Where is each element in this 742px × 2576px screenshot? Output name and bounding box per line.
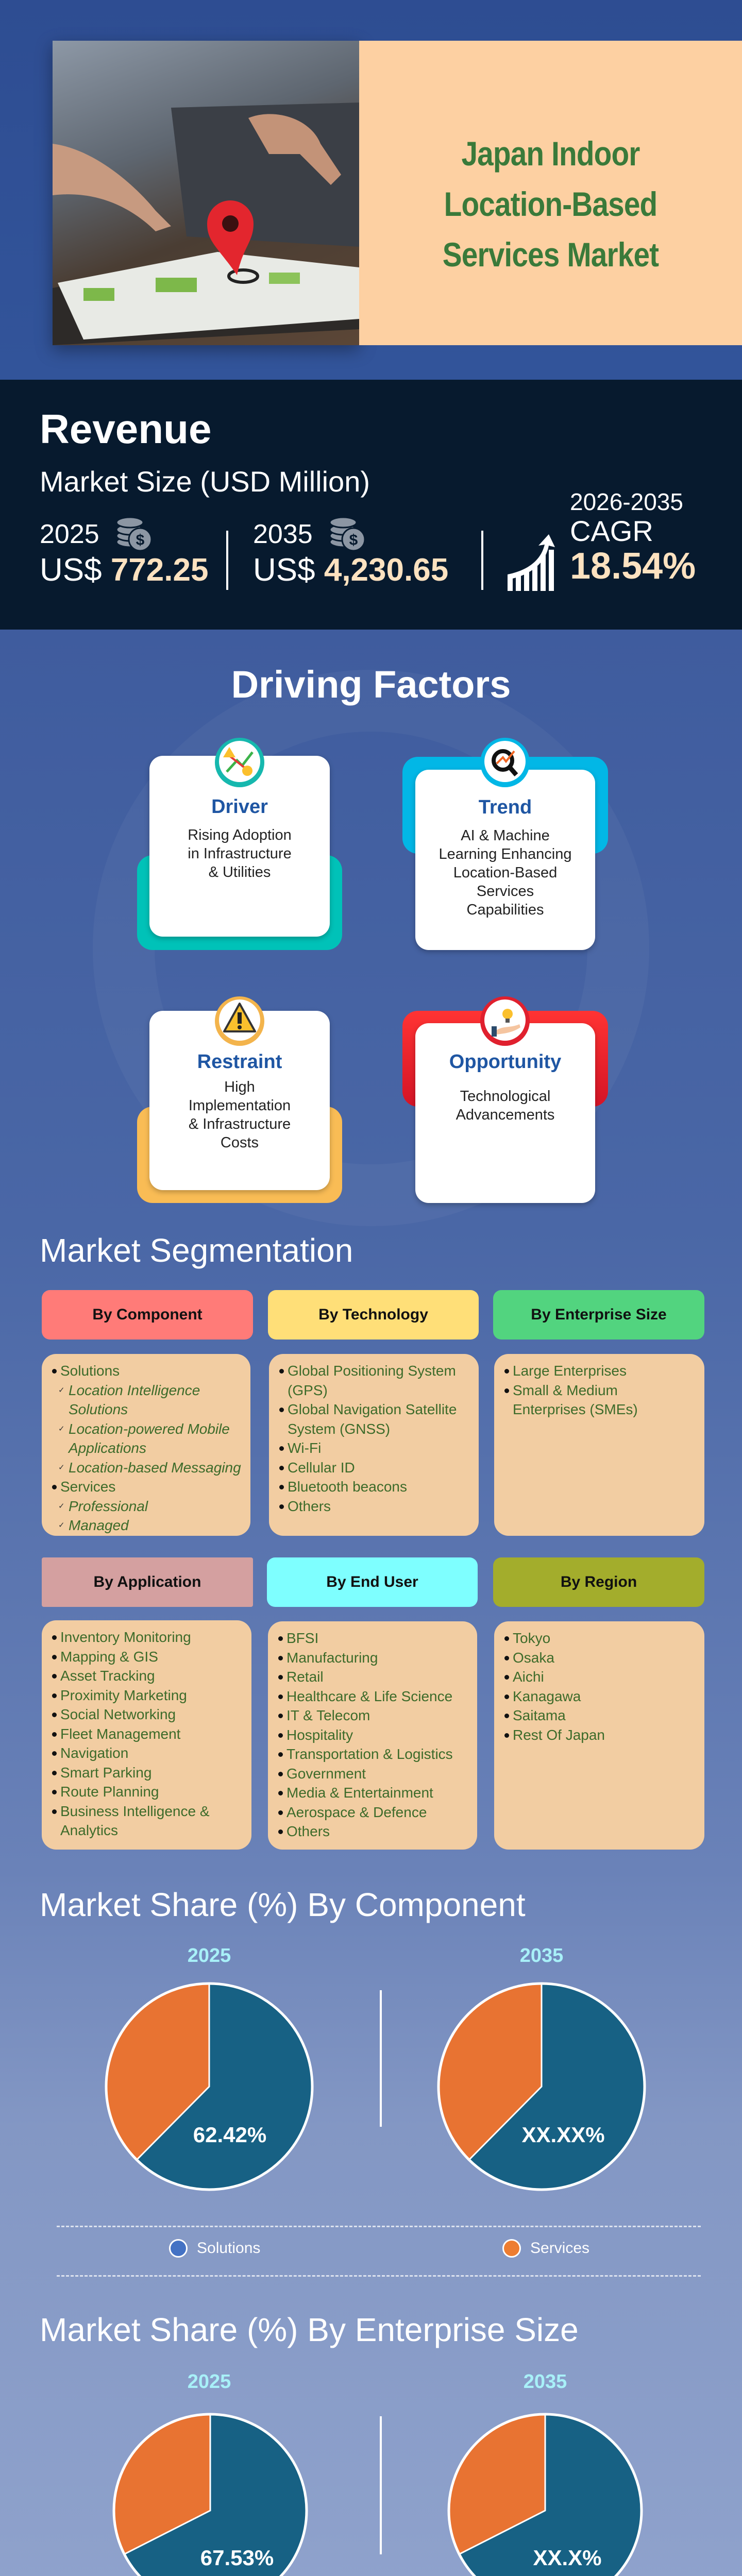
- panel: driver: Driver: [211, 796, 268, 818]
- title: Location-Based: [444, 185, 657, 223]
- CAGR: 2026-2035: [570, 488, 683, 515]
- panel: trend: Trend: [479, 796, 532, 818]
- icon: growth chart: [508, 534, 555, 591]
- pie chart: component 2035: [437, 1982, 646, 2191]
- pie chart: component 2035: XX.XX%: [521, 2123, 605, 2147]
- panel: restraint: Costs: [221, 1134, 259, 1151]
- legend: component: Solutions: [197, 2240, 260, 2257]
- icon: warning: [215, 996, 264, 1046]
- icon: coins: [331, 518, 364, 550]
- segment: by application: Fleet Management: [60, 1726, 180, 1741]
- 2035 value: 2035: [253, 519, 313, 549]
- segment: by application: Mapping & GIS: [60, 1649, 158, 1664]
- segment: by component: [42, 1290, 253, 1536]
- heading: market segmentation: Market Segmentation: [40, 1232, 353, 1269]
- segment: by application: Social Networking: [60, 1706, 176, 1722]
- 2025 value: [40, 518, 208, 588]
- pie chart: enterprise 2035: XX.X%: [533, 2546, 602, 2570]
- icon: coins: $: [349, 532, 358, 549]
- 2035 value: US$ 4,230.65: [253, 552, 448, 588]
- 2025 value: US$ 772.25: [40, 552, 208, 588]
- 2025 value: 2025: [40, 519, 99, 549]
- segment: by technology: Others: [288, 1498, 331, 1514]
- segment: by component: By Component: [92, 1306, 203, 1323]
- label 2035: 2035: [524, 2371, 567, 2393]
- segment: by end user: By End User: [326, 1573, 418, 1590]
- segment: by component: Applications: [69, 1440, 146, 1456]
- panel: driver: [137, 738, 342, 950]
- segment: by component: Services: [60, 1479, 115, 1495]
- segment: by region: Rest Of Japan: [513, 1727, 605, 1742]
- pie chart: enterprise 2035: [447, 2413, 643, 2576]
- segment: by application: Business Intelligence &: [60, 1803, 210, 1819]
- segment: by end user: Media & Entertainment: [286, 1785, 433, 1801]
- segment: by application: Analytics: [60, 1822, 118, 1838]
- panel: driver: in Infrastructure: [188, 845, 292, 862]
- segment: by region: Tokyo: [513, 1630, 550, 1646]
- panel: restraint: [137, 996, 342, 1203]
- CAGR: CAGR: [570, 515, 653, 547]
- market size label: Market Size (USD Million): [40, 465, 370, 498]
- segment: by enterprise size: [493, 1290, 704, 1536]
- panel: trend: [402, 738, 608, 954]
- panel: restraint: High: [224, 1079, 255, 1095]
- label 2035: 2035: [520, 1945, 563, 1967]
- panel: trend: Capabilities: [467, 902, 544, 918]
- segment: by component: Location-based Messaging: [69, 1459, 241, 1476]
- segment: by end user: Hospitality: [286, 1727, 353, 1742]
- segment: by component: Solutions: [60, 1363, 120, 1379]
- segment: by end user: IT & Telecom: [286, 1707, 370, 1723]
- title: Japan Indoor: [461, 134, 640, 173]
- segment: by end user: BFSI: [286, 1630, 318, 1646]
- segment: by enterprise size: Large Enterprises: [513, 1363, 627, 1379]
- segment: by application: Proximity Marketing: [60, 1687, 187, 1703]
- icon: opportunity: [480, 996, 530, 1046]
- segment: by technology: Bluetooth beacons: [288, 1479, 407, 1495]
- panel: opportunity: Opportunity: [449, 1051, 561, 1073]
- panel: restraint: & Infrastructure: [189, 1116, 291, 1132]
- segment: by technology: System (GNSS): [288, 1421, 390, 1436]
- panel: driver: & Utilities: [209, 864, 271, 880]
- icon: coins: $: [136, 532, 145, 549]
- segment: by application: Inventory Monitoring: [60, 1629, 191, 1645]
- divider: [226, 531, 228, 590]
- segment: by technology: Cellular ID: [288, 1459, 355, 1476]
- segment: by component: Professional: [69, 1498, 148, 1514]
- segment: by region: Kanagawa: [513, 1688, 581, 1704]
- panel: opportunity: [402, 996, 608, 1207]
- revenue panel: [0, 380, 742, 630]
- 2035 value: [253, 518, 448, 588]
- legend: component: [169, 2239, 589, 2258]
- title panel: [359, 41, 742, 345]
- segment: by technology: (GPS): [288, 1382, 328, 1398]
- segment: by region: Saitama: [513, 1707, 566, 1723]
- icon: trend: [481, 738, 529, 787]
- segment: by region: Aichi: [513, 1669, 544, 1685]
- legend: component: Services: [530, 2240, 589, 2257]
- panel: restraint: Restraint: [197, 1051, 282, 1073]
- segment: by application: Smart Parking: [60, 1764, 151, 1781]
- segment: by technology: Global Navigation Satellite: [288, 1401, 457, 1417]
- segment: by region: By Region: [561, 1573, 637, 1590]
- panel: opportunity: Advancements: [456, 1107, 554, 1123]
- segment: by application: By Application: [94, 1573, 201, 1590]
- revenue heading: Revenue: [40, 406, 211, 452]
- icon: driver: [215, 738, 264, 787]
- panel: trend: Learning Enhancing: [439, 846, 571, 862]
- heading: market share by component: Market Share (%) By Component: [40, 1886, 526, 1923]
- segment: by application: Navigation: [60, 1745, 128, 1761]
- segment: by component: Solutions: [69, 1401, 128, 1417]
- panel: opportunity: Technological: [460, 1088, 550, 1105]
- CAGR: [570, 488, 696, 587]
- segment: by application: Asset Tracking: [60, 1668, 155, 1684]
- panel: trend: Location-Based: [453, 865, 557, 881]
- panel: restraint: Implementation: [189, 1097, 291, 1114]
- segment: by technology: [268, 1290, 479, 1536]
- segment: by technology: Wi-Fi: [288, 1440, 321, 1456]
- segment: by region: [493, 1557, 704, 1850]
- title: [443, 134, 659, 274]
- segment: by enterprise size: By Enterprise Size: [531, 1306, 667, 1323]
- segment: by application: Route Planning: [60, 1784, 159, 1800]
- segment: by component: Location-powered Mobile: [69, 1421, 230, 1436]
- pie chart: enterprise 2025: [112, 2413, 308, 2576]
- heading: market share by enterprise size: Market Share (%) By Enterprise Size: [40, 2311, 579, 2348]
- segment: by end user: Aerospace & Defence: [286, 1804, 427, 1820]
- hero photo: [53, 41, 359, 345]
- segment: by technology: By Technology: [318, 1306, 428, 1323]
- pie chart: component 2025: 62.42%: [193, 2123, 266, 2147]
- panel: trend: Services: [477, 883, 534, 900]
- icon: coins: [117, 518, 150, 550]
- segment: by end user: Transportation & Logistics: [286, 1746, 453, 1762]
- segment: by end user: Government: [286, 1765, 366, 1782]
- heading: driving factors: Driving Factors: [231, 663, 511, 706]
- segment: by region: Osaka: [513, 1650, 554, 1665]
- label 2025: 2025: [188, 1945, 231, 1967]
- panel: driver: Rising Adoption: [188, 827, 292, 843]
- segment: by end user: [267, 1557, 478, 1850]
- segment: by end user: Retail: [286, 1669, 324, 1685]
- pie chart: component 2025: [105, 1982, 313, 2191]
- segment: by end user: Manufacturing: [286, 1650, 378, 1665]
- title: Services Market: [443, 235, 659, 274]
- panel: trend: AI & Machine: [461, 827, 550, 844]
- segment: by enterprise size: Enterprises (SMEs): [513, 1401, 638, 1417]
- segment: by application: [42, 1557, 253, 1850]
- segment: by enterprise size: Small & Medium: [513, 1382, 618, 1398]
- segment: by component: Location Intelligence: [69, 1382, 200, 1398]
- segment: by end user: Healthcare & Life Science: [286, 1688, 452, 1704]
- pie chart: enterprise 2025: 67.53%: [200, 2546, 274, 2570]
- segment: by end user: Others: [286, 1823, 330, 1839]
- segment: by component: Managed: [69, 1517, 129, 1533]
- label 2025: 2025: [188, 2371, 231, 2393]
- CAGR: 18.54%: [570, 546, 696, 587]
- segment: by technology: Global Positioning System: [288, 1363, 456, 1379]
